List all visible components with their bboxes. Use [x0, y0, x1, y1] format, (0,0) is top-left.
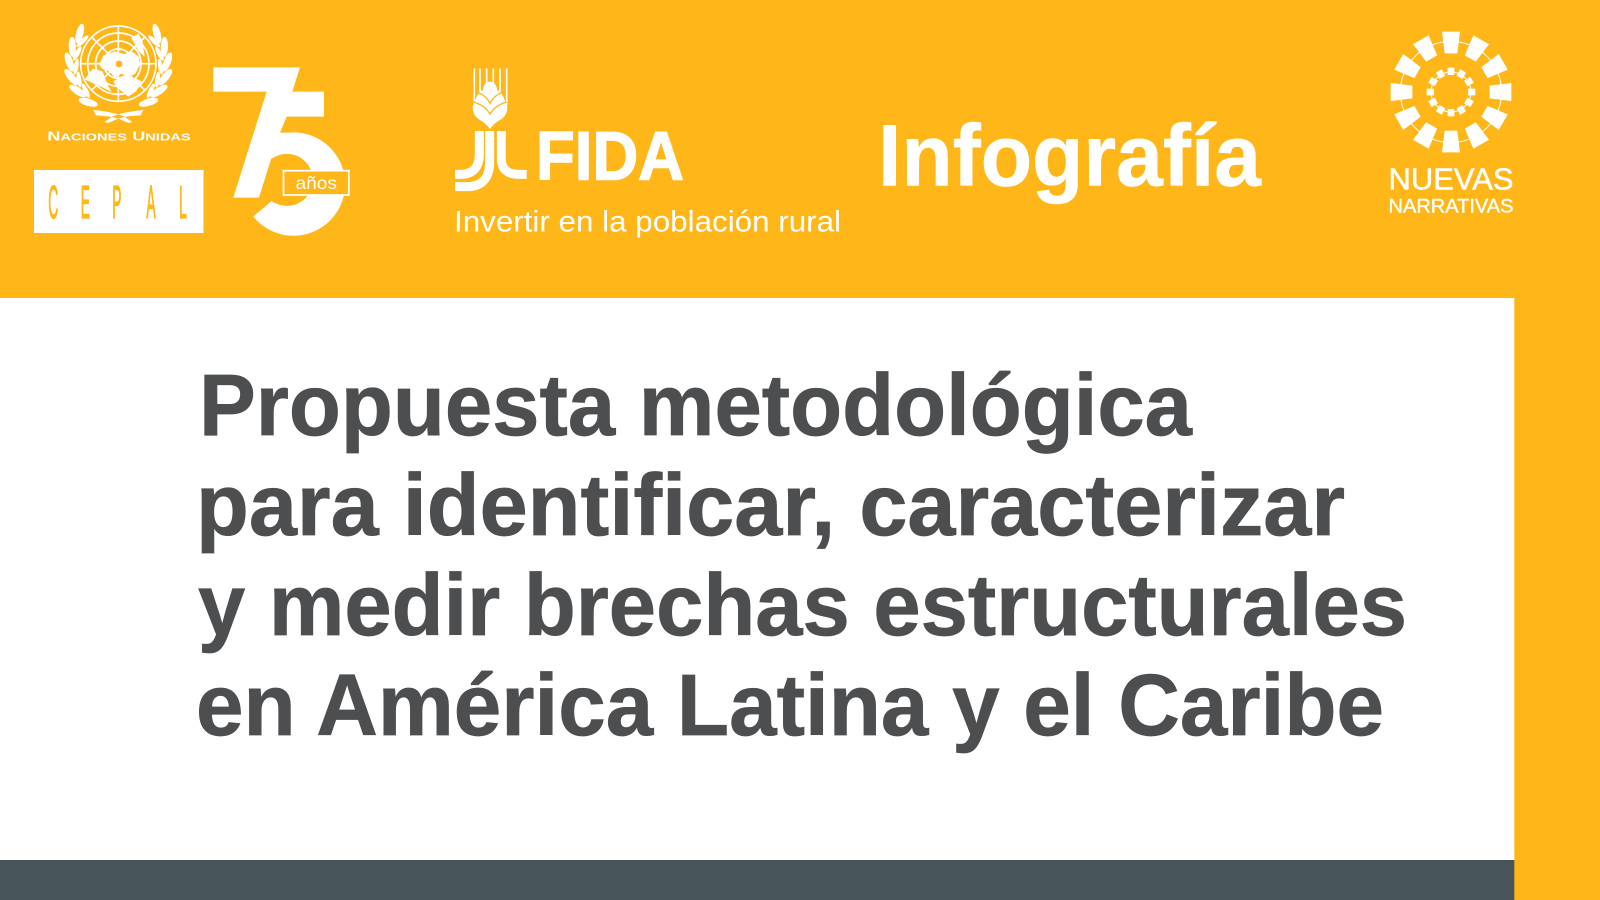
- title line 1: Propuesta metodológica: [199, 357, 1193, 454]
- title line 3: y medir brechas estructurales: [198, 557, 1407, 654]
- JJL stems: [455, 131, 527, 187]
- left olive branch: [62, 23, 99, 109]
- right olive branch: [138, 23, 174, 109]
- continents: [85, 33, 145, 97]
- title line 4: en América Latina y el Caribe: [196, 657, 1384, 754]
- label: Naciones Unidas: N ACIONES U NIDAS: [47, 130, 191, 144]
- años tag: [284, 171, 349, 195]
- logo: FIDA: [454, 68, 841, 239]
- numeral 7 and 5: [213, 67, 345, 236]
- panel: white title panel: [0, 298, 1514, 860]
- FIDA wordmark: FIDA: [536, 117, 684, 194]
- logo: CEPAL box: [34, 170, 204, 233]
- heading: Infografía: Infografía: [878, 108, 1262, 205]
- title line 2: para identificar, caracterizar: [196, 457, 1345, 554]
- años tag: años: [296, 173, 337, 193]
- wheat ear: [473, 68, 507, 129]
- title: [196, 357, 1407, 754]
- CEPAL letters: CEPAL: [48, 177, 187, 229]
- logo: Nuevas Narrativas: [1388, 32, 1514, 218]
- FIDA tagline: Invertir en la población rural: [454, 206, 841, 239]
- logo: 75 años: [213, 67, 349, 236]
- CEPAL white box: [34, 170, 204, 233]
- globe rings and meridians: [81, 26, 156, 101]
- logo: Naciones Unidas emblem: [62, 23, 174, 123]
- wheat ear and JJL mark: [455, 68, 527, 187]
- ribbon crossing: [93, 110, 143, 123]
- NARRATIVAS wordmark: NARRATIVAS: [1388, 196, 1514, 218]
- outer and inner rings: [1391, 32, 1511, 152]
- footer bar: [0, 860, 1514, 900]
- NUEVAS wordmark: NUEVAS: [1388, 162, 1514, 196]
